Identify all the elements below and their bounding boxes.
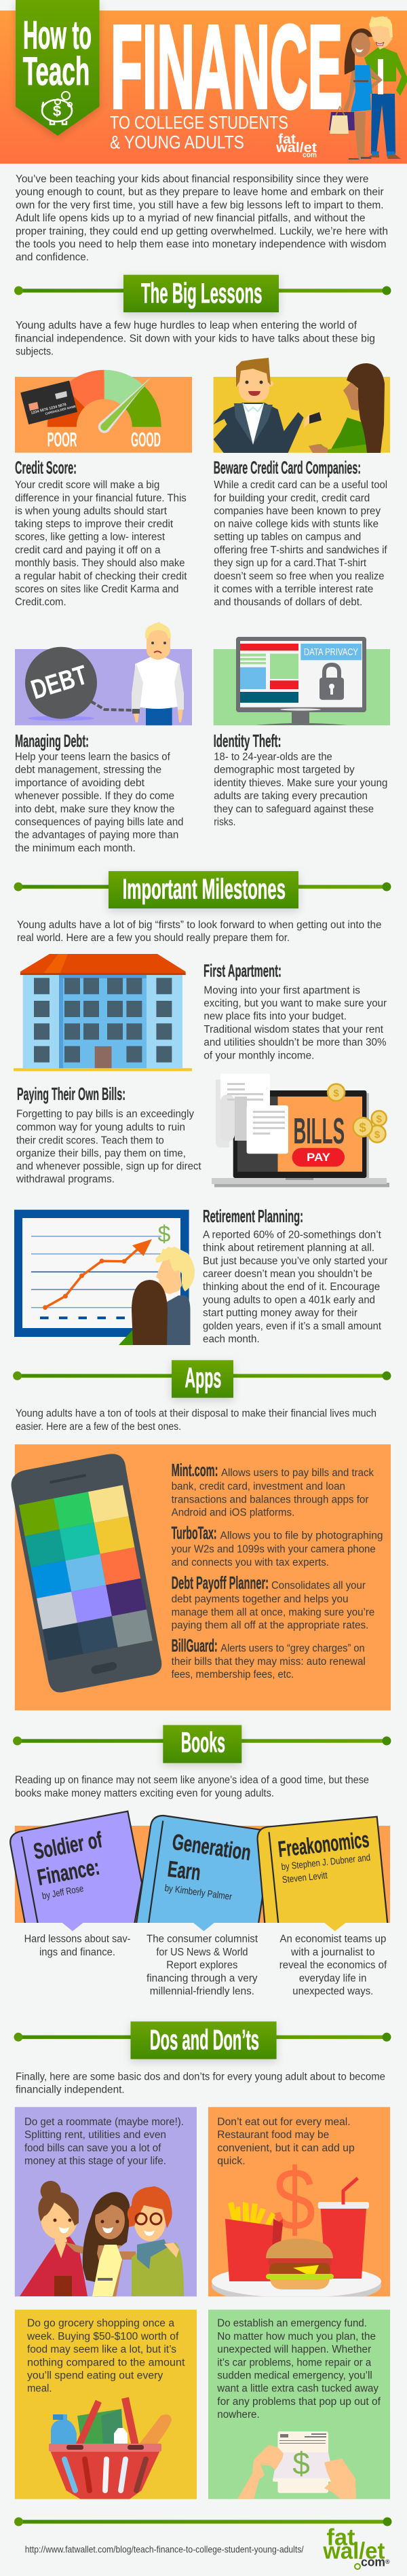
panel: get a roommate: Do get a roommate (maybe more!). [24,2116,184,2128]
panel: don't eat out [208,2107,390,2304]
illustration: fast food and dollar sign: $ [273,2150,315,2249]
book description: Generation Earn: The consumer columnist [147,1934,258,1945]
panel: don't eat out: Restaurant food may be [217,2129,329,2141]
section heading: Dos and Don'ts: Dos and Don’ts [150,2023,259,2055]
text block: credit score: credit card and paying it off on a [15,545,161,556]
book description: Freakonomics: unexpected ways. [292,1986,373,1998]
text block: credit card companies: setting up tables on campus and [214,532,361,543]
panel: go grocery shopping: week. Buying $50-$100 worth of [26,2331,179,2342]
panel: get a roommate: Splitting rent, utilities and even [24,2129,166,2141]
text block: credit score [15,458,187,608]
app: Debt Payoff Planner: paying them all off at the appropriate rates. [172,1619,368,1631]
panel: get a roommate [15,2107,197,2297]
lessons intro text: subjects. [16,346,54,357]
app: BillGuard: their bills that they may miss: auto renewal [172,1656,366,1668]
shopping bags [329,112,355,130]
app: TurboTax: TurboTax: [172,1523,217,1543]
icon: credit card [21,382,77,424]
icon: debt ball [25,647,97,719]
text block: credit score: Your credit score will make a big [15,479,159,491]
book: Generation Earn: Earn [166,1856,202,1885]
icon: credit card: 1234 5678 1234 5678 [31,403,66,416]
text block: credit card companies [214,458,387,608]
plate [212,2283,381,2296]
section heading: Apps: Apps [185,1361,221,1393]
book description: Soldier of Finance: Hard lessons about sav- [24,1934,130,1945]
panel: don't eat out: Don’t eat out for every meal. [217,2116,351,2128]
illustration: laptop bill pay: $ [376,1114,383,1125]
man [371,94,395,153]
burger [266,2239,333,2258]
text block: paying their own bills: withdrawal programs. [16,1174,115,1185]
drink cup [321,2209,366,2279]
text block: managing debt: importance of avoiding debt [15,777,145,789]
section heading: The Big Lessons: The Big Lessons [141,277,262,309]
text block: paying their own bills [16,1084,201,1185]
illustration: laptop bill pay: $ [359,1121,366,1135]
text block: credit score: monthly basis. They should also make [15,557,185,569]
book description: Generation Earn: Report explores [166,1959,238,1971]
text block: paying their own bills: and whenever possible, sign up for direct [16,1160,201,1172]
text block: managing debt: whenever possible. If they do come [14,790,174,802]
intro text: own for the very first time, you still have a few big lessons left to impart to them. [16,200,384,211]
text block: credit score: a regular habit of checking their credit [15,570,187,582]
book description: Freakonomics: An economist teams up [279,1934,386,1945]
panel: get a roommate: money at this stage of your life. [24,2156,166,2167]
text block: credit score: taking steps to improve their credit [15,519,174,530]
woman with green top [309,363,385,453]
computer monitor [236,637,366,725]
app: Debt Payoff Planner: manage them all at once, making sure you’re [172,1606,374,1618]
logo: fatwallet white: com [303,151,317,160]
app: Mint.com: Mint.com: [172,1460,218,1480]
text block: paying their own bills: their credit scores. Teach them to [16,1135,164,1146]
text block: paying their own bills: common way for young adults to ruin [16,1122,185,1133]
icon: smartphone [12,1454,161,1693]
text block: identity theft: 18- to 24-year-olds are the [214,751,332,762]
intro text: proper training, they could end up getting overwhelmed. Luckily, we’re here with [16,225,388,237]
couple seen from behind [119,1247,195,1345]
illustration: laptop bill pay: $ [374,1129,381,1141]
text block: credit score: difference in your financial future. This [15,492,187,504]
text block: credit score: scores, like getting a low- interest [15,532,166,543]
text block: credit card companies: While a credit card can be a useful tool [214,479,387,491]
apps intro text: Young adults have a ton of tools at their disposal to make their financial lives much [16,1408,376,1420]
book: Soldier of Finance: Finance: [35,1854,102,1890]
text block: managing debt: the advantages of paying more than [15,830,178,841]
milestones intro text: real world. Here are a few you should really prepare them for. [17,932,290,944]
illustration: three roommates [20,2181,184,2297]
panel: emergency fund: it’s car problems, home repair or a [217,2357,372,2368]
milestones intro text: Young adults have a lot of big “firsts” to look forward to when getting out into the [17,919,381,931]
panel: apps [12,1444,391,1710]
book description: Freakonomics: with a journalist to [290,1947,375,1958]
heading: First Apartment: [204,960,282,980]
logo: fatwallet green: fat [326,2524,355,2550]
panel: emergency fund: want a little extra cash tucked away [216,2383,379,2395]
roommate left [20,2237,88,2296]
book: Generation Earn: Generation [171,1829,252,1865]
book description: Freakonomics: reveal the economics of [279,1959,387,1971]
ribbon: How to Teach: How to [23,14,92,58]
app: Mint.com: Allows users to pay bills and track [221,1467,374,1479]
text block: credit score: Credit.com. [15,597,66,608]
panel: emergency fund: No matter how much you plan, the [217,2331,376,2342]
text block: managing debt [14,731,184,854]
panel: credit score illustration: POOR [47,428,77,451]
text block: credit score: scores on sites like Credit Karma and [15,584,178,595]
text block: managing debt: debt management, stressing the [15,765,161,776]
ribbon: How to Teach: Teach [23,50,90,94]
illustration: retirement chart [14,1210,195,1345]
text block: credit card companies: and thousands of dollars of debt. [214,597,362,608]
text block: first apartment: Traditional wisdom states that your rent [204,1024,384,1035]
logo: fatwallet green: ® [385,2558,390,2565]
text block: first apartment [204,960,387,1061]
panel: go grocery shopping: Do go grocery shopping once a [27,2318,174,2330]
logo: fatwallet white: fat [278,132,296,147]
heading: Managing Debt: [15,731,89,751]
section heading: Dos and Don'ts [14,2021,391,2059]
illustration: hands holding bank statement: $ [292,2446,310,2481]
book description: Soldier of Finance [24,1934,130,1958]
panel: don't eat out: quick. [217,2156,246,2167]
book description: Freakonomics [279,1934,387,1998]
panel: emergency fund: Do establish an emergency fund. [217,2318,367,2330]
text block: identity theft: identity thieves. Make sure your young [214,777,387,789]
book description: Generation Earn [147,1934,258,1998]
app: TurboTax: and connects you with tax experts. [172,1557,329,1568]
illustration: young couple [329,16,407,160]
text block: credit card companies: doesn’t seem so free when you realize [214,570,384,582]
icon: padlock [319,665,344,700]
man in suit [214,358,322,453]
text block: first apartment: of your monthly income. [204,1050,314,1061]
icon: apartment building [14,954,192,1071]
panel: managing debt illustration [15,622,192,725]
icon: credit card: CARDHOLDER NAME [45,405,76,416]
heading: Identity Theft: [214,731,282,751]
panel: go grocery shopping: nothing compared to the amount [27,2357,185,2368]
gauge needle [98,378,151,433]
intro text: Adult life opens kids up to a myriad of new financial pitfalls, and without the [16,213,365,224]
text block: first apartment: exciting, but you want to make sure your [204,998,387,1010]
panel: credit score illustration [15,370,192,453]
logo: fatwallet green: wal/et [322,2538,385,2564]
text block: paying their own bills: Forgetting to pay bills is an exceedingly [16,1109,194,1120]
footer divider [14,2518,392,2526]
computer monitor: DATA PRIVACY [304,646,358,658]
app: Debt Payoff Planner: Debt Payoff Planner: [172,1572,269,1593]
app: Debt Payoff Planner: debt payments together and helps you [172,1594,349,1605]
lessons intro text: Young adults have a few huge hurdles to leap when entering the world of [16,320,357,331]
illustration: laptop bill pay [212,1074,389,1187]
woman [343,67,383,112]
app: Debt Payoff Planner: Consolidates all your [271,1580,366,1591]
text block: credit card companies: companies have been known to prey [214,505,381,517]
text block: identity theft: risks. [214,816,236,828]
panel: books [10,1811,390,1931]
icon: debt ball: DEBT [28,660,91,705]
app: BillGuard: BillGuard: [172,1636,218,1656]
illustration: retirement chart: $ [158,1221,171,1247]
text block: credit card companies: it comes with a terrible interest rate [214,584,373,595]
panel: credit card companies illustration [214,358,390,453]
man in white sweater [132,622,184,725]
header banner [0,0,407,164]
panel: emergency fund: sudden medical emergency, you’ll [217,2370,372,2381]
books intro text: books make money matters exciting even for young adults. [15,1788,274,1799]
panel: identity theft illustration [214,637,390,725]
app: BillGuard: Alerts users to “grey charges” on [220,1643,365,1655]
text block: retirement planning: start putting money away for their [203,1308,357,1319]
text block: credit score: is when young adults should start [15,505,168,517]
intro text: the tools you need to help them ease into monetary independence with wisdom [16,239,387,251]
subtitle [110,112,288,152]
panel: credit score illustration: GOOD [131,428,161,451]
app: TurboTax [172,1523,383,1568]
text block: first apartment: new place fits into your budget. [204,1011,347,1023]
book: Soldier of Finance [10,1811,142,1931]
section heading: Apps [13,1360,391,1398]
app: TurboTax: your W2s and 1099s with your camera phone [172,1544,376,1556]
app: BillGuard: fees, membership fees, etc. [172,1669,294,1680]
text block: credit card companies: on naive college kids with stunts like [214,519,379,530]
logo: fatwallet white: wal/et [275,141,317,155]
logo: fatwallet green: com [361,2555,385,2569]
text block: identity theft: demographic most targeted by [214,765,355,776]
app: Mint.com: bank, credit card, investment and loan [172,1481,345,1492]
text block: retirement planning: think about retirement planning at all. [203,1243,374,1254]
section heading: Important Milestones: Important Milestones [123,872,286,904]
roommate middle [64,2242,136,2260]
text block: retirement planning: But just because you’ve only started your [203,1255,387,1267]
panel: go grocery shopping [15,2310,197,2499]
roommate right [132,2243,184,2296]
panel: go grocery shopping: you’ll spend eating out every [27,2370,163,2382]
subtitle: & YOUNG ADULTS [110,132,244,152]
text block: retirement planning: golden years, even if it’s a small amount [203,1321,382,1332]
apps intro text: easier. Here are a few of the best ones. [16,1421,181,1433]
heading: Credit Score: [15,458,77,478]
illustration: laptop bill pay: PAY [307,1151,331,1164]
book: Freakonomics: Steven Levitt [282,1869,328,1885]
book: Generation Earn [136,1816,266,1931]
panel: go grocery shopping: meal. [27,2383,52,2395]
text block: retirement planning: A reported 60% of 20-somethings don’t [203,1229,381,1240]
text block: retirement planning: young adults to open a 401k early and [203,1294,375,1306]
subtitle: TO COLLEGE STUDENTS [110,112,288,132]
apps intro text [16,1408,376,1433]
text block: identity theft: they can to safeguard against these [214,803,374,815]
lessons intro text [15,320,375,357]
text block: credit card companies: for building your credit, credit card [214,492,370,504]
section heading: The Big Lessons [14,275,391,312]
book description: Generation Earn: for US News & World [156,1947,248,1958]
book: Soldier of Finance: Soldier of [31,1826,104,1864]
books intro text: Reading up on finance may not seem like anyone’s idea of a good time, but these [15,1775,369,1786]
chain [91,701,132,710]
icon: coins [328,1084,387,1142]
text block: managing debt: consequences of paying bills late and [15,816,183,828]
section heading: Books [13,1725,391,1763]
dos and don'ts intro text: Finally, here are some basic dos and don’ts for every young adult about to become [16,2071,385,2082]
panel: get a roommate: food bills can save you a lot of [24,2142,161,2154]
book: Freakonomics: by Stephen J. Dubner and [281,1852,371,1872]
text block: retirement planning: each month. [203,1333,260,1345]
text block: credit card companies: they sign up for a card.That T-shirt [214,557,367,569]
book: Soldier of Finance: by Jeff Rose [41,1883,85,1901]
books intro text [15,1775,369,1799]
book: Freakonomics [258,1817,388,1931]
fries [228,2202,275,2226]
book description: Soldier of Finance: ings and finance. [39,1947,115,1958]
text block: retirement planning: career doesn’t mean you shouldn’t be [203,1268,372,1280]
heading: Retirement Planning: [203,1206,303,1226]
panel: emergency fund [208,2310,390,2500]
text block: credit card companies: offering free T-shirts and sandwiches if [214,545,387,556]
illustration: laptop bill pay: BILLS [293,1111,345,1152]
book: Generation Earn: by Kimberly Palmer [164,1882,233,1902]
milestones intro text [17,919,381,944]
intro text: and confidence. [16,252,89,263]
source url: http://www.fatwallet.com/blog/teach-finance-to-college-student-young-adults/ [25,2543,304,2554]
book description: Generation Earn: millennial-friendly lens. [150,1986,254,1998]
section heading: Important Milestones [14,871,391,908]
text block: identity theft: adults are taking every precaution [214,790,368,802]
illustration: laptop bill pay: $ [333,1088,339,1099]
panel: emergency fund: for any problems that pop up out of [217,2396,381,2408]
intro text [16,173,388,263]
illustration: hands holding bank statement [237,2431,356,2500]
book description: Freakonomics: everyday life in [299,1972,366,1984]
text block: first apartment: and utilities shouldn’t be more than 30% [204,1037,387,1048]
icon: piggy bank: $ [53,103,61,119]
ribbon: How to Teach [16,0,100,136]
illustration: fast food and dollar sign [212,2165,381,2296]
text block: retirement planning: thinking about the end of it. Encourage [203,1281,380,1293]
panel: don't eat out: convenient, but it can add up [217,2142,355,2154]
section heading: Books: Books [181,1727,225,1759]
dos and don'ts intro text: financially independent. [16,2084,125,2095]
app: Mint.com [172,1460,374,1518]
text block: identity theft [214,731,387,828]
intro text: You’ve been teaching your kids about financial responsibility since they were [16,173,368,185]
book description: Generation Earn: financing through a very [147,1972,258,1984]
fries box [225,2219,283,2281]
text block: retirement planning [203,1206,387,1345]
text block: first apartment: Moving into your first apartment is [204,985,360,996]
panel: emergency fund: unexpected will happen. Whether [217,2344,371,2355]
logo: fatwallet white [275,132,317,160]
dos and don'ts intro text [16,2071,385,2095]
icon: piggy bank [42,92,72,124]
logo: fatwallet green [322,2524,390,2569]
icon: paper bills [216,1074,288,1154]
app: TurboTax: Allows you to file by photographing [220,1530,383,1542]
app: Mint.com: transactions and balances through apps for [172,1494,368,1505]
text block: managing debt: Help your teens learn the basics of [15,751,170,762]
intro text: young enough to count, but as they prepare to leave home and embark on their [16,187,384,198]
illustration: shopping basket [49,2398,172,2499]
lessons intro text: financial independence. Sit down with your kids to have talks about these big [15,333,375,344]
line with arrow [43,1239,152,1310]
app: Debt Payoff Planner [172,1572,374,1631]
panel: go grocery shopping: food may seem like a lot, but it’s [27,2344,176,2355]
heading: Paying Their Own Bills: [17,1084,125,1104]
text block: managing debt: into debt, make sure they know the [15,803,175,815]
panel: emergency fund: nowhere. [217,2409,260,2421]
app: Mint.com: Android and iOS platforms. [172,1507,294,1518]
text block: managing debt: the minimum each month. [15,843,136,854]
app: BillGuard [172,1636,366,1680]
text block: paying their own bills: organize their bills, pay them on time, [16,1147,186,1159]
